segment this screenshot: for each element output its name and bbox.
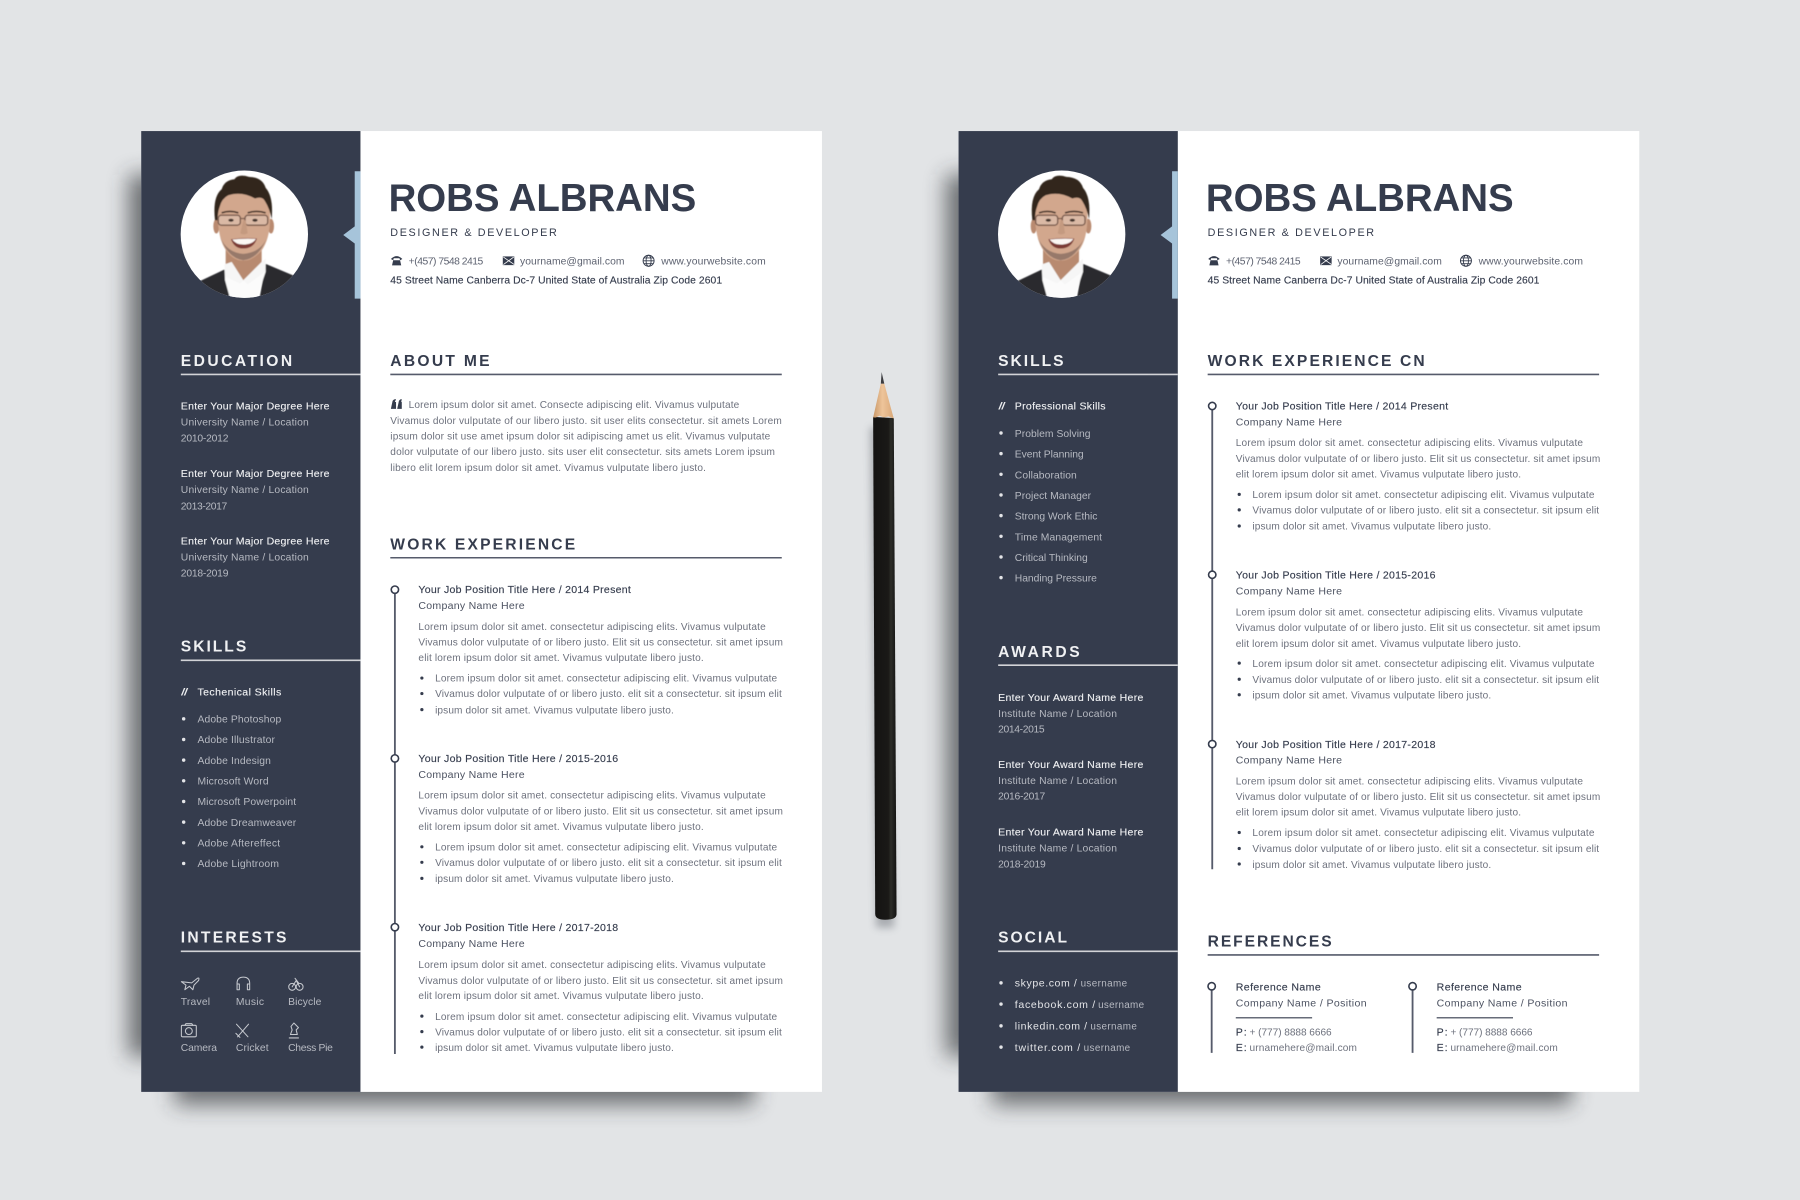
job 1: ipsum dolor sit amet. Vivamus vulputate libero justo. [1252,522,1491,533]
job 2: Company Name Here [1236,586,1342,598]
skills list: Adobe Aftereffect [197,838,280,849]
education list: 2013-2017 [181,501,228,512]
icon: phone [1208,256,1220,265]
awards list: Institute Name / Location [998,776,1117,787]
skills list: Adobe Photoshop [197,714,281,725]
panel: right resume [959,131,1639,1092]
reference 1 [1208,981,1367,1054]
job 3: ipsum dolor sit amet. Vivamus vulputate libero justo. [435,1043,674,1054]
education list: Enter Your Major Degree Here [181,536,330,548]
contact row: www.yourwebsite.com [1478,256,1583,267]
professional skills list: Event Planning [1015,450,1084,461]
interests: Travel [181,997,210,1008]
address: 45 Street Name Canberra Dc-7 United State of Australia Zip Code 2601 [390,276,722,287]
panel: left resume [141,131,822,1092]
job 1: elit lorem ipsum dolor sit amet. Vivamus vulputate libero justo. [418,653,704,664]
address: 45 Street Name Canberra Dc-7 United State of Australia Zip Code 2601 [1208,276,1540,287]
skills list: Adobe Dreamweaver [197,818,297,829]
awards list: 2014-2015 [998,725,1045,736]
professional skills list: Critical Thinking [1015,553,1088,564]
icon: globe [643,255,654,266]
contact row: +(457) 7548 2415 [1226,256,1301,267]
professional skills list: Project Manager [1015,491,1092,502]
job 1: Lorem ipsum dolor sit amet. consectetur adipiscing elit. Vivamus vulputate [1252,490,1595,501]
job 1: ipsum dolor sit amet. Vivamus vulputate libero justo. [435,705,674,716]
job 2 [1236,570,1600,702]
education list: 2010-2012 [181,434,229,445]
name title: ROBS ALBRANS [1206,177,1514,220]
role: DESIGNER & DEVELOPER [390,227,557,239]
sidebar [959,131,1178,1092]
reference 1: Company Name / Position [1236,997,1367,1009]
job 3: Vivamus dolor vulputate of or libero justo. elit sit a consectetur. sit ipsum elit [435,1027,782,1038]
icon: headphones [237,977,250,990]
job 1: Company Name Here [418,600,525,612]
job 3: Lorem ipsum dolor sit amet. consectetur adipiscing elits. Vivamus vulputate [1236,776,1583,787]
professional skills list: // [998,400,1006,412]
skills list: Adobe Illustrator [197,735,275,746]
shadow: left resume [129,175,754,1105]
sidebar [141,131,360,1092]
shadow: right resume [946,175,1572,1105]
education list: Enter Your Major Degree Here [181,400,330,412]
role: DESIGNER & DEVELOPER [1208,227,1374,239]
reference 1: + (777) 8888 6666 [1250,1028,1332,1039]
about me text: libero elit lorem ipsum dolor sit amet. Vivamus vulputate libero justo. [390,463,706,474]
professional skills list: Strong Work Ethic [1015,512,1097,523]
icon: bicycle [289,978,303,990]
social list: linkedin.com / [1015,1021,1087,1033]
job 2: ipsum dolor sit amet. Vivamus vulputate libero justo. [435,874,674,885]
social list: username [1090,1022,1137,1033]
contact row: +(457) 7548 2415 [409,256,484,267]
name title: ROBS ALBRANS [389,177,696,220]
job 1: Your Job Position Title Here / 2014 Present [1236,400,1448,412]
about me text [390,399,782,474]
reference 1: urnamehere@mail.com [1250,1043,1357,1054]
heading: about me: ABOUT ME [390,353,490,370]
interests: Cricket [236,1043,269,1054]
icon: cricket [236,1024,249,1037]
interests: Music [236,997,264,1008]
icon: plane [181,978,199,990]
education list: University Name / Location [181,553,309,564]
heading: awards: AWARDS [998,644,1080,661]
job 1: elit lorem ipsum dolor sit amet. Vivamus vulputate libero justo. [1236,469,1521,480]
awards list [998,692,1143,870]
heading: work experience: WORK EXPERIENCE [390,536,575,553]
timeline [391,586,399,1054]
job 3: Lorem ipsum dolor sit amet. consectetur adipiscing elit. Vivamus vulputate [1252,828,1595,839]
job 2: ipsum dolor sit amet. Vivamus vulputate libero justo. [1252,691,1491,702]
job 1: Lorem ipsum dolor sit amet. consectetur adipiscing elits. Vivamus vulputate [1236,438,1583,449]
job 1 [418,584,783,716]
awards list: Enter Your Award Name Here [998,759,1143,771]
job 2: Lorem ipsum dolor sit amet. consectetur adipiscing elits. Vivamus vulputate [418,791,766,802]
skills list: Techenical Skills [197,686,281,698]
professional skills list: Professional Skills [1015,400,1105,412]
job 2: elit lorem ipsum dolor sit amet. Vivamus vulputate libero justo. [1236,639,1521,650]
job 1: Vivamus dolor vulputate of or libero justo. elit sit a consectetur. sit ipsum elit [435,689,782,700]
social list: facebook.com / [1015,999,1095,1011]
job 2: Vivamus dolor vulputate of or libero justo. elit sit a consectetur. sit ipsum elit [1252,675,1599,686]
job 3 [418,922,783,1054]
icon: envelope [503,256,514,265]
timeline [1209,402,1216,869]
job 1 [1236,400,1600,533]
education list: Enter Your Major Degree Here [181,468,330,480]
interests: Chess Pie [288,1043,333,1054]
sheet background [141,131,822,1092]
reference 1: Reference Name [1236,981,1321,993]
job 1: Vivamus dolor vulputate of or libero justo. elit sit a consectetur. sit ipsum elit [1252,506,1599,517]
job 3: Vivamus dolor vulputate of or libero justo. Elit sit us consectetur. sit amet ipsum [1236,792,1600,803]
awards list: Institute Name / Location [998,709,1117,720]
job 2: Lorem ipsum dolor sit amet. consectetur adipiscing elit. Vivamus vulputate [1252,659,1595,670]
education list [181,400,330,579]
reference 2: Reference Name [1437,981,1522,993]
heading: interests: INTERESTS [181,930,286,947]
contact row: yourname@gmail.com [520,256,624,267]
professional skills list: Problem Solving [1015,429,1091,440]
skills list: Adobe Lightroom [197,859,279,870]
reference 2: + (777) 8888 6666 [1450,1028,1533,1039]
job 2: Your Job Position Title Here / 2015-2016 [1236,570,1436,582]
sheet background [959,131,1639,1092]
skills list [180,686,297,870]
job 3: Vivamus dolor vulputate of or libero justo. elit sit a consectetur. sit ipsum elit [1252,844,1599,855]
reference 2 [1409,981,1568,1054]
job 1: Vivamus dolor vulputate of or libero justo. Elit sit us consectetur. sit amet ipsum [1236,454,1600,465]
profile photo [998,171,1125,305]
skills list: Adobe Indesign [197,756,271,767]
contact row: www.yourwebsite.com [660,256,766,267]
job 2: Lorem ipsum dolor sit amet. consectetur adipiscing elits. Vivamus vulputate [1236,607,1583,618]
job 3: elit lorem ipsum dolor sit amet. Vivamus vulputate libero justo. [1236,807,1521,818]
pencil [870,372,897,928]
icon: quote [391,399,402,409]
heading: education: EDUCATION [181,353,292,370]
professional skills list: Handing Pressure [1015,574,1097,585]
interests: Bicycle [288,997,322,1008]
job 3: elit lorem ipsum dolor sit amet. Vivamus vulputate libero justo. [418,991,704,1002]
about me text: Vivamus dolor vulputate of our libero justo. sit user elits consectetur. sit amets Lorem [390,416,782,427]
about me text: Lorem ipsum dolor sit amet. Consecte adipiscing elit. Vivamus vulputate [409,400,740,411]
skills list: Microsoft Powerpoint [197,797,296,808]
job 2: elit lorem ipsum dolor sit amet. Vivamus vulputate libero justo. [418,822,704,833]
heading: work experience cn: WORK EXPERIENCE CN [1208,353,1425,370]
contact row: yourname@gmail.com [1337,256,1442,267]
education list: University Name / Location [181,418,309,429]
job 1: Lorem ipsum dolor sit amet. consectetur adipiscing elits. Vivamus vulputate [418,622,766,633]
job 3: Company Name Here [1236,755,1342,767]
icon: chess piece [289,1023,298,1038]
professional skills list: Collaboration [1015,470,1077,481]
job 3: Lorem ipsum dolor sit amet. consectetur adipiscing elits. Vivamus vulputate [418,960,766,971]
job 3: Lorem ipsum dolor sit amet. consectetur adipiscing elit. Vivamus vulputate [435,1012,778,1023]
skills list: Microsoft Word [197,776,269,787]
job 3: Your Job Position Title Here / 2017-2018 [1236,739,1436,751]
social list: username [1084,1043,1131,1054]
job 3: Your Job Position Title Here / 2017-2018 [418,922,618,934]
job 2: Lorem ipsum dolor sit amet. consectetur adipiscing elit. Vivamus vulputate [435,842,778,853]
icon: phone [391,256,402,265]
reference 2: Company Name / Position [1437,997,1568,1009]
education list: University Name / Location [181,485,309,496]
awards list: 2016-2017 [998,792,1045,803]
skills list: // [180,686,188,698]
job 1: Vivamus dolor vulputate of or libero justo. Elit sit us consectetur. sit amet ipsum [418,638,783,649]
job 1: Your Job Position Title Here / 2014 Present [418,584,631,596]
contact row [1208,255,1583,267]
awards list: Institute Name / Location [998,844,1117,855]
reference 1: P : [1236,1027,1247,1039]
job 3: Company Name Here [418,938,525,950]
reference 2: E : [1437,1042,1448,1054]
job 1: Lorem ipsum dolor sit amet. consectetur adipiscing elit. Vivamus vulputate [435,674,778,685]
job 2: Vivamus dolor vulputate of or libero justo. Elit sit us consectetur. sit amet ipsum [1236,623,1600,634]
awards list: Enter Your Award Name Here [998,827,1143,839]
awards list: Enter Your Award Name Here [998,692,1143,704]
job 3: Vivamus dolor vulputate of or libero justo. Elit sit us consectetur. sit amet ipsum [418,976,783,987]
about me text: ipsum dolor sit use amet ipsum dolor sit adipiscing amet us elit. Vivamus vulputate [390,432,771,443]
social list: username [1081,979,1128,990]
icon: camera [181,1024,196,1037]
job 2: Vivamus dolor vulputate of or libero justo. elit sit a consectetur. sit ipsum elit [435,858,782,869]
profile photo [181,171,308,305]
reference 2: urnamehere@mail.com [1450,1043,1558,1054]
professional skills list: Time Management [1015,532,1102,543]
accent bar and pointer [343,171,360,299]
job 1: Company Name Here [1236,417,1342,429]
reference 1: E : [1236,1042,1247,1054]
job 2 [418,753,783,885]
heading: references: REFERENCES [1208,934,1332,951]
social list: username [1098,1000,1145,1011]
icon: envelope [1320,256,1332,265]
interests [181,977,333,1054]
social list: twitter.com / [1015,1042,1080,1054]
job 2: Vivamus dolor vulputate of or libero justo. Elit sit us consectetur. sit amet ipsum [418,806,783,817]
heading: social: SOCIAL [998,930,1067,947]
accent bar and pointer [1161,171,1178,299]
social list [999,978,1145,1054]
heading: skills: SKILLS [181,639,246,656]
about me text: dolor vulputate of our libero justo. sits user elit consectetur. sits amets Lorem ipsum [390,447,775,458]
job 2: Your Job Position Title Here / 2015-2016 [418,753,618,765]
interests: Camera [181,1043,217,1054]
heading: skills: SKILLS [998,353,1064,370]
contact row [391,255,766,267]
reference 2: P : [1437,1027,1448,1039]
awards list: 2018-2019 [998,859,1046,870]
job 3 [1236,739,1600,871]
icon: globe [1460,255,1471,266]
social list: skype.com / [1015,978,1077,990]
education list: 2018-2019 [181,568,229,579]
professional skills list [998,400,1105,585]
job 2: Company Name Here [418,769,525,781]
job 3: ipsum dolor sit amet. Vivamus vulputate libero justo. [1252,860,1491,871]
